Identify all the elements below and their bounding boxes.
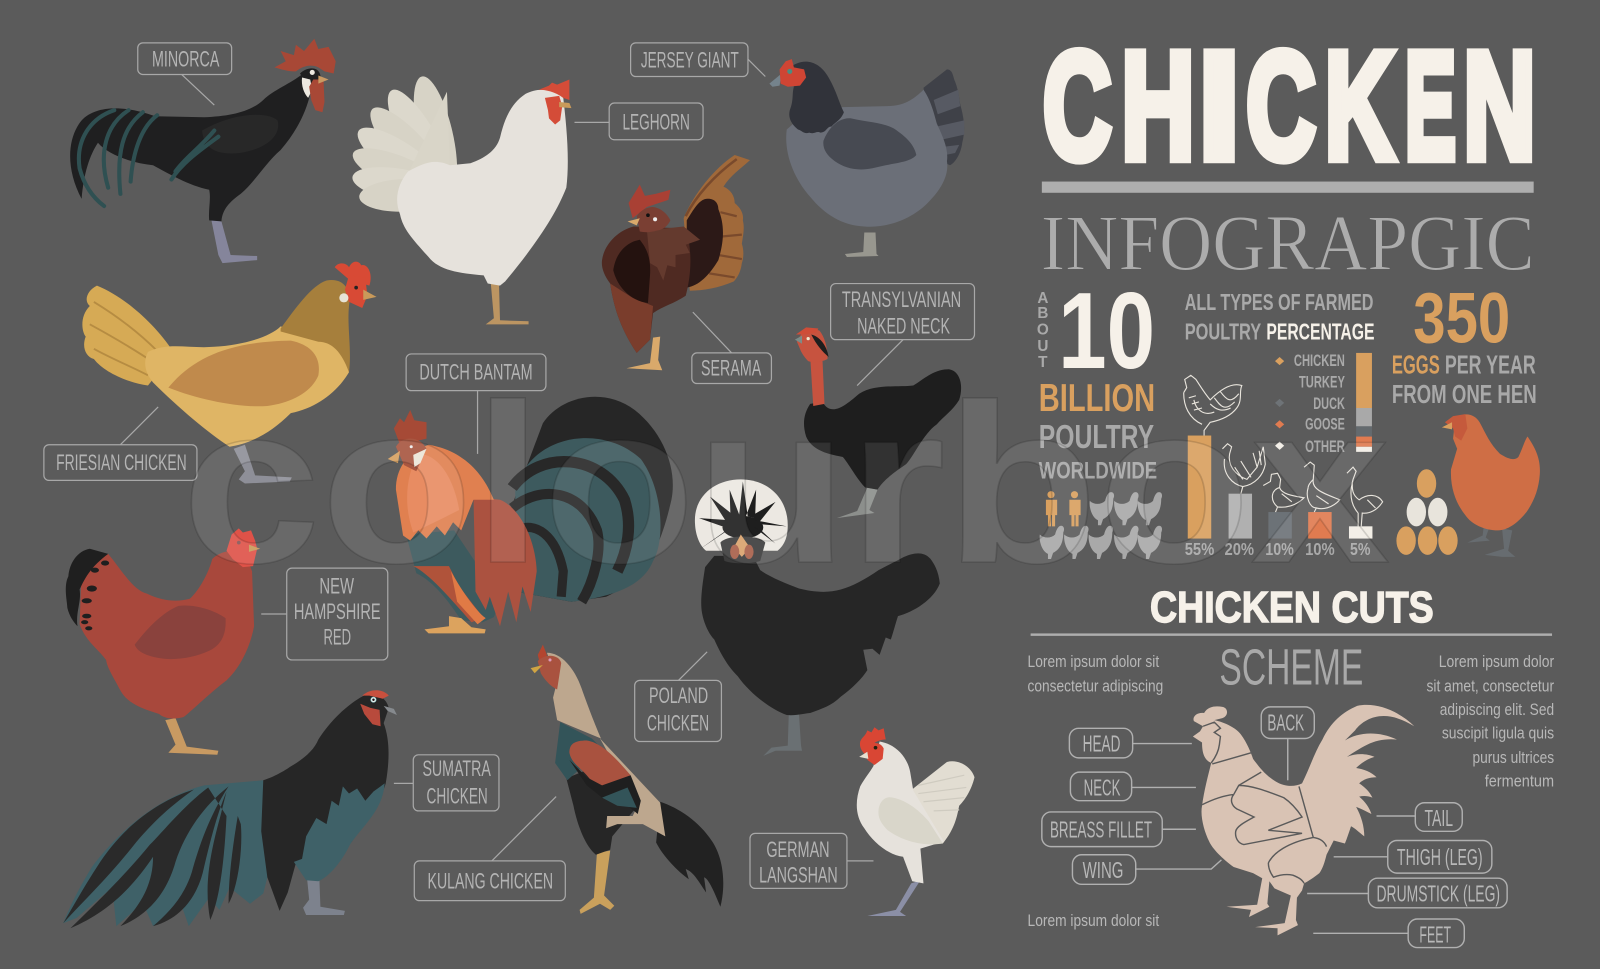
chicken: serama [602,155,750,370]
label: dutch bantam: DUTCH BANTAM [419,359,533,384]
label: poland chicken: CHICKEN [647,710,709,735]
lorem text bottom: Lorem ipsum dolor sit [1028,911,1159,930]
subtitle: INFOGRAPGIC [1041,199,1535,287]
chicken: leghorn [347,73,571,324]
label: dutch bantam [406,354,546,454]
rooster cuts diagram [1193,705,1414,935]
cut label: back [1261,707,1314,780]
stacked bar [1356,353,1372,452]
title: H [1121,21,1194,191]
title: K [1325,21,1394,191]
bar chart [1184,375,1383,559]
legend: CHICKEN [1294,352,1345,370]
cut label: neck [1070,772,1196,801]
label: leghorn: LEGHORN [622,110,690,135]
cut label: tail: TAIL [1424,805,1453,831]
chicken: jersey giant [769,59,964,257]
cut label: drumstick: DRUMSTICK (LEG) [1377,881,1500,907]
label: jersey giant: JERSEY GIANT [641,47,739,72]
lorem text right [1427,652,1554,790]
lorem text right: fermentum [1485,771,1554,790]
label: leghorn [574,103,703,140]
label: new hampshire red [261,568,388,660]
lorem text right: sit amet, consectetur [1427,677,1554,696]
stat: 10 billion poultry: POULTRY [1039,419,1154,456]
chicken: kulang [531,645,723,914]
icon: rooster outline [1184,375,1242,436]
legend: OTHER [1305,438,1345,456]
label: kulang chicken: KULANG CHICKEN [428,868,553,893]
title: C [1246,21,1316,191]
chicken: friesian [82,262,377,483]
lorem text left: Lorem ipsum dolor sit [1028,652,1159,671]
title rule [1042,182,1534,193]
chicken: german langshan [857,727,974,916]
label: german langshan: GERMAN [766,837,830,862]
lorem text left: consectetur adipiscing [1028,677,1163,696]
cut label: feet [1313,919,1464,948]
stat: 10 billion poultry [1037,270,1162,559]
cut label: wing [1072,855,1221,884]
cut label: thigh [1334,840,1492,873]
stat: 10 billion poultry: T [1038,354,1048,371]
label: sumatra chicken: SUMATRA [422,756,491,781]
lorem text right: purus ultrices [1472,748,1554,767]
title: N [1463,21,1536,191]
watermark: colourbox [182,357,1390,610]
lorem text right: suscipit ligula quis [1442,723,1554,742]
icon: eggs [1396,469,1458,555]
label: german langshan [750,833,873,888]
lorem text right: adipiscing elit. Sed [1440,700,1554,719]
label: sumatra chicken [394,755,499,811]
label: poland chicken [635,652,721,742]
legend: TURKEY [1299,374,1345,392]
cut label: tail [1377,803,1462,831]
label: new hampshire red: NEW [319,574,355,599]
scheme subheading: SCHEME [1219,638,1363,695]
label: minorca [138,43,232,105]
label: kulang chicken [414,797,565,901]
stat: 10 billion poultry: WORLDWIDE [1039,457,1157,484]
lorem text left [1028,652,1163,696]
label: sumatra chicken: CHICKEN [427,784,488,809]
title: I [1198,21,1240,191]
chicken: poland [695,479,940,756]
stat: 350 eggs per year: PER YEAR [1445,351,1536,379]
bar chart: 10% [1305,539,1335,559]
chicken: new hampshire red [66,528,260,755]
cut label: thigh: THIGH (LEG) [1397,844,1483,870]
stat: 10 billion poultry: BILLION [1039,377,1155,420]
poultry percentage heading: POULTRY [1185,319,1261,345]
label: minorca: MINORCA [152,46,219,71]
chicken: transylvanian naked neck [795,327,961,518]
label: german langshan: LANGSHAN [759,862,838,887]
label: serama: SERAMA [701,355,761,380]
title: E [1405,21,1456,191]
bar chart: 20% [1224,539,1254,559]
stat: 350 eggs per year: FROM ONE HEN [1392,381,1537,409]
label: new hampshire red: HAMPSHIRE [294,599,381,624]
chicken: minorca [70,39,336,263]
icon: turkey outline [1222,444,1265,494]
cut label: back: BACK [1267,709,1304,735]
cut label: breast fillet [1042,812,1196,847]
legend: DUCK [1313,395,1345,413]
cut label: feet: FEET [1419,921,1451,947]
stat: 10 billion poultry: O [1037,322,1049,339]
poultry percentage heading: PERCENTAGE [1266,319,1374,345]
cut label: breast fillet: BREASS FILLET [1050,816,1152,842]
icon: orange hen [1442,414,1540,557]
label: friesian chicken: FRIESIAN CHICKEN [56,450,187,475]
stat: 10 billion poultry: A [1037,290,1048,307]
lorem text right: Lorem ipsum dolor [1439,652,1554,671]
stat: 350 eggs per year: EGGS [1392,351,1440,379]
legend [1275,352,1345,456]
cuts divider [1031,633,1552,636]
label: serama [692,312,771,384]
legend: GOOSE [1305,415,1345,433]
stat: 10 billion poultry: 10 [1058,270,1155,391]
cut label: head [1069,728,1192,758]
stat: 10 billion poultry: B [1037,305,1048,322]
label: transylvanian naked neck: TRANSYLVANIAN [842,287,961,312]
bar chart: 10% [1265,539,1294,559]
icon: duck outline [1263,473,1304,512]
stat: 350 eggs per year: 350 [1413,279,1510,359]
label: jersey giant [631,43,765,76]
bar chart: 5% [1350,539,1370,559]
label: friesian chicken [44,407,197,480]
people and hens icons [1040,491,1162,559]
title: C [1043,21,1111,191]
label: transylvanian naked neck [831,284,974,386]
chicken: sumatra [63,690,397,928]
label: new hampshire red: RED [323,625,351,650]
label: poland chicken: POLAND [649,683,708,708]
bar chart: 55% [1185,539,1214,559]
icon: ostrich outline [1347,467,1383,526]
label: transylvanian naked neck: NAKED NECK [857,314,950,339]
poultry percentage heading: ALL TYPES OF FARMED [1185,289,1373,315]
poultry percentage heading [1185,289,1374,345]
cut label: neck: NECK [1084,775,1121,801]
cut label: drumstick [1307,878,1507,908]
cut label: head: HEAD [1083,731,1120,757]
icon: goose outline [1304,462,1340,512]
chicken: dutch bantam [388,397,673,633]
cut label: wing: WING [1083,857,1123,883]
stat: 10 billion poultry: U [1037,338,1048,355]
chicken cuts heading: CHICKEN CUTS [1150,583,1434,632]
stat: 350 eggs per year [1392,279,1537,409]
